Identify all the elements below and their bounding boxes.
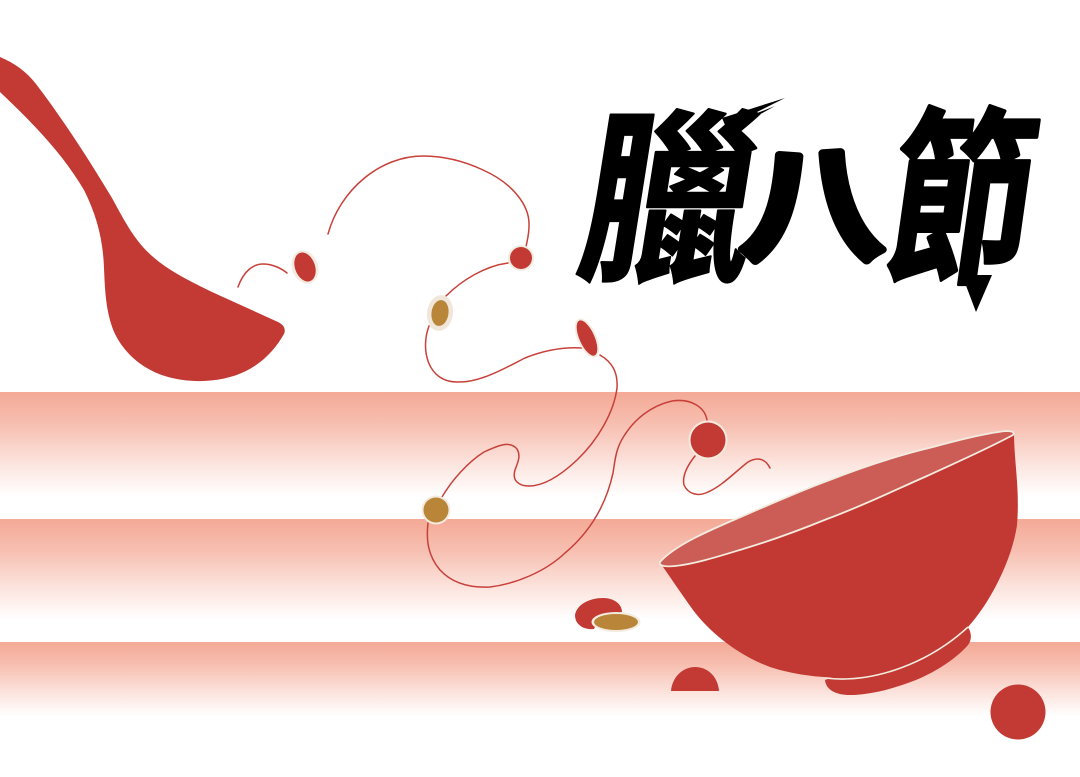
title [566, 49, 1056, 323]
title character 2: 八 [739, 105, 885, 287]
bean: red long oval [570, 315, 604, 361]
striped background bands [0, 392, 1080, 722]
bean: brown oval [425, 293, 455, 333]
title character 3: 節 [873, 49, 1056, 323]
icon: ladle [0, 57, 285, 381]
bean: red oval near ladle [287, 247, 323, 287]
flowing red threads [238, 156, 770, 587]
bean: red round on band [688, 420, 728, 460]
round bean bottom right [990, 684, 1046, 740]
bean: brown round [422, 496, 450, 524]
title character 1: 臘 [566, 51, 780, 320]
brush streaks [722, 98, 992, 312]
bean pile: red and brown [575, 598, 640, 632]
bowl foot [825, 626, 971, 695]
half bean [671, 667, 719, 691]
bowl [660, 431, 1018, 679]
bean: red round top [508, 245, 534, 271]
